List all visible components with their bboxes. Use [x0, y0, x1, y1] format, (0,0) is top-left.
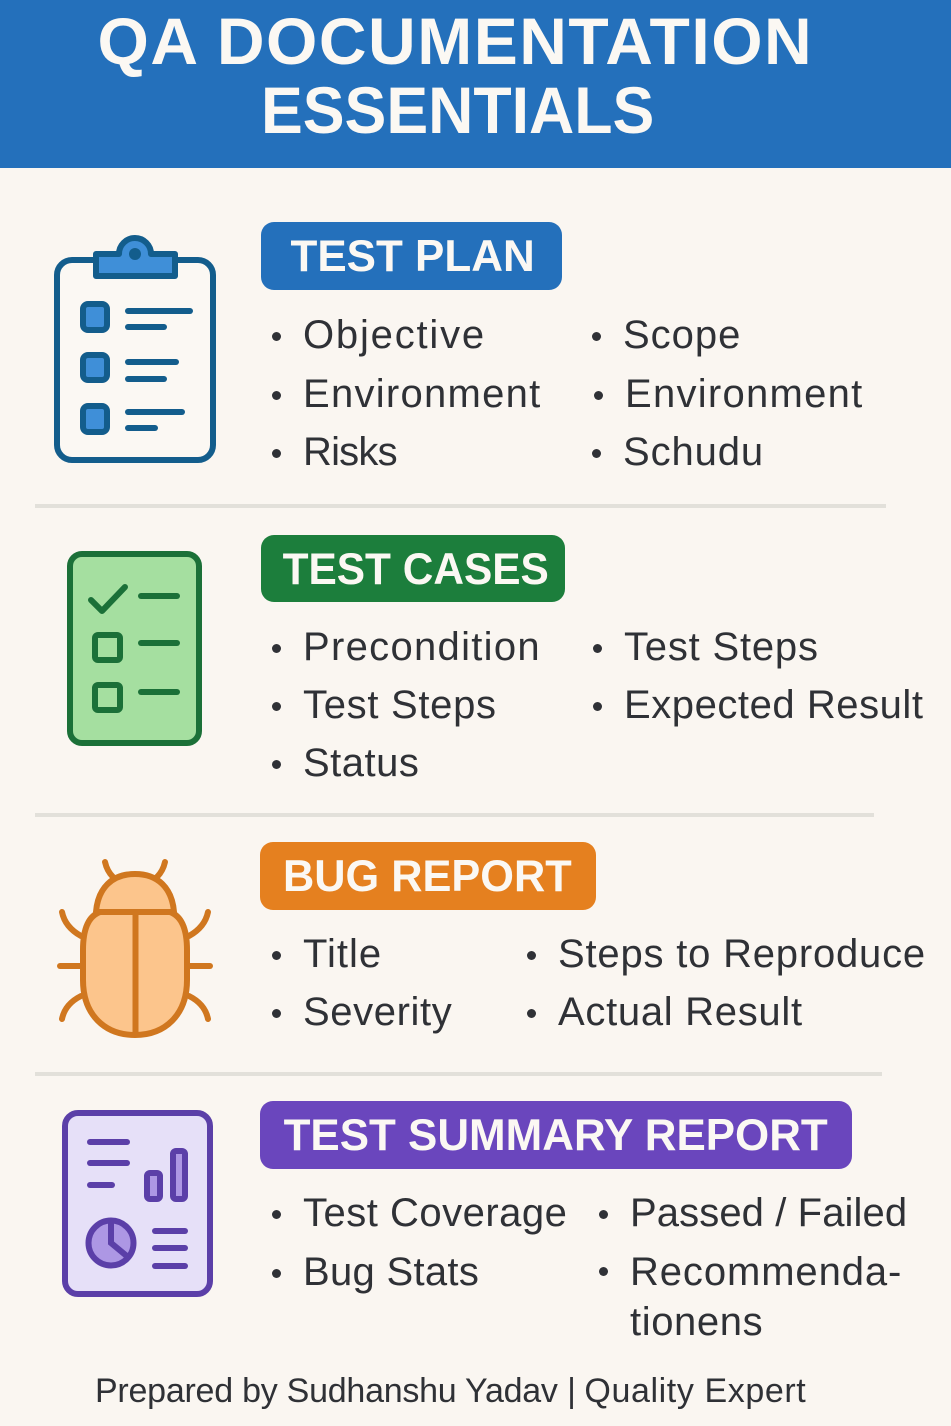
- list item: Status: [303, 741, 419, 785]
- icon: clipboard: [54, 235, 216, 463]
- list item: Passed / Failed: [630, 1191, 907, 1235]
- list item: Title: [303, 932, 382, 976]
- list item: Test Steps: [624, 625, 819, 669]
- list item: Environment: [303, 372, 542, 416]
- list item: tionens: [630, 1300, 763, 1344]
- heading: test plan: [261, 222, 562, 290]
- list item: Recommenda-: [630, 1250, 902, 1294]
- list item: Risks: [303, 430, 397, 474]
- list item: [630, 1247, 902, 1347]
- list item: Bug Stats: [303, 1250, 479, 1294]
- icon: report: [62, 1110, 213, 1297]
- list item: Actual Result: [558, 990, 803, 1034]
- footer credit: Prepared by Sudhanshu Yadav | Quality Expert: [95, 1372, 806, 1410]
- list item: Environment: [625, 372, 864, 416]
- heading: test cases: TEST CASES: [282, 545, 549, 594]
- list item: Severity: [303, 990, 452, 1034]
- list item: Test Steps: [303, 683, 497, 727]
- title line 2: ESSENTIALS: [260, 73, 654, 147]
- heading: bug report: [260, 842, 596, 910]
- icon: checklist: [67, 551, 202, 746]
- title banner: [0, 0, 951, 168]
- icon: bug: [57, 859, 213, 1038]
- list item: Scope: [623, 313, 741, 357]
- list item: Steps to Reproduce: [558, 932, 926, 976]
- heading: test plan: TEST PLAN: [291, 232, 535, 281]
- list item: Schudu: [623, 430, 764, 474]
- title line 1: QA DOCUMENTATION: [98, 4, 813, 78]
- list item: Test Coverage: [303, 1191, 567, 1235]
- heading: test summary report: TEST SUMMARY REPORT: [284, 1111, 828, 1160]
- list item: Expected Result: [624, 683, 924, 727]
- section: test plan: [261, 222, 864, 474]
- list item: Objective: [303, 313, 486, 357]
- section: test cases: [261, 535, 924, 785]
- heading: test summary report: [260, 1101, 852, 1169]
- section: bug report: [260, 842, 926, 1034]
- heading: test cases: [261, 535, 565, 602]
- heading: bug report: BUG REPORT: [283, 852, 571, 901]
- list item: Precondition: [303, 625, 541, 669]
- section: test summary report: [260, 1101, 907, 1344]
